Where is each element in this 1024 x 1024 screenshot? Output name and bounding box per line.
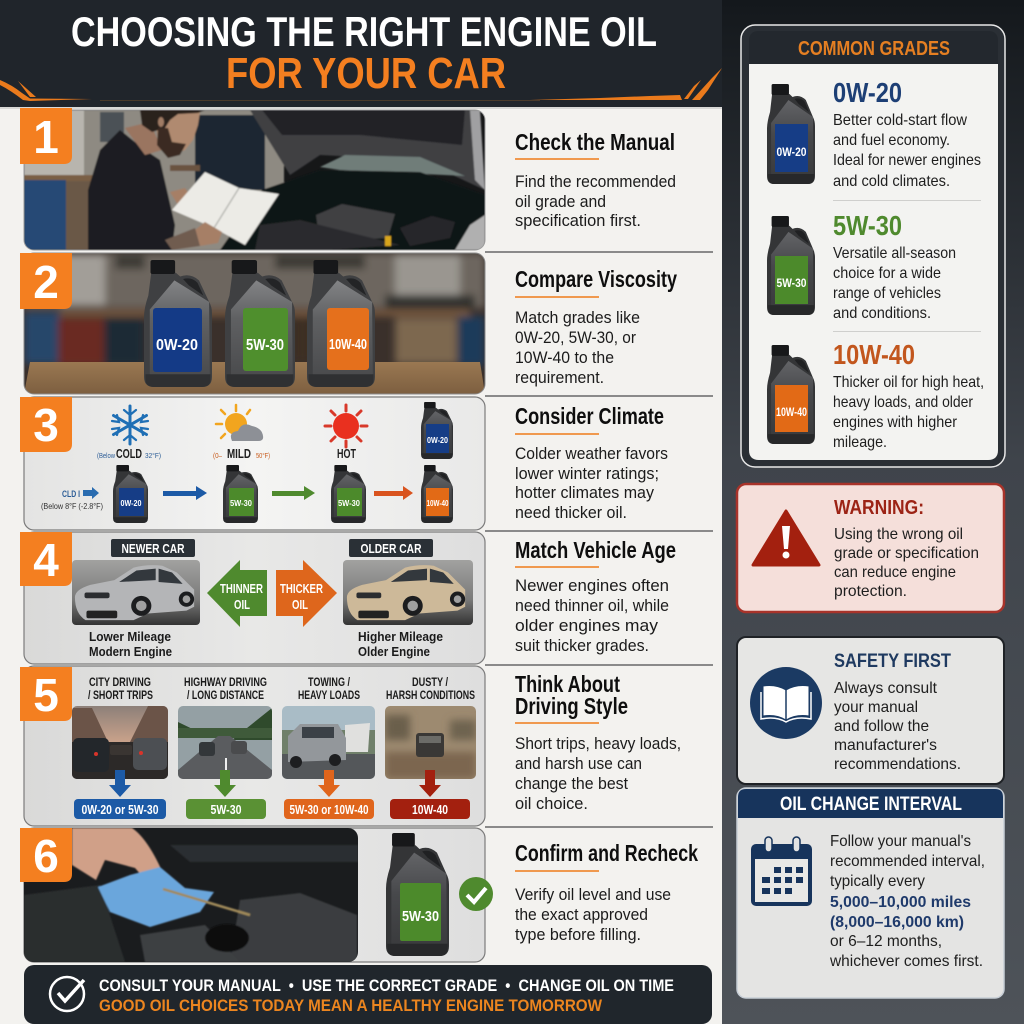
- grade: 0W-20: 0W-20: [776, 145, 807, 159]
- grade: 10W-40: 10W-40: [776, 405, 807, 419]
- divider: [485, 826, 713, 828]
- text block: driving style: Driving Style: [515, 693, 628, 719]
- footer banner: GOOD OIL CHOICES TODAY MEAN A HEALTHY ENGINE TOMORROW: [99, 996, 603, 1015]
- panel: oil change interval: OIL CHANGE INTERVAL: [780, 794, 962, 815]
- caption: higher mileage: Older Engine: [358, 644, 430, 659]
- footer banner: [24, 965, 712, 1024]
- jug: top 0W-20: 0W-20: [427, 435, 448, 445]
- arrow: thinner oil: OIL: [234, 598, 250, 612]
- jug: 0W-20: [113, 465, 148, 523]
- panel: warning: grade or specification: [834, 545, 979, 562]
- panel: oil change interval: 5,000–10,000 miles: [830, 894, 971, 911]
- text block: consider climate: Consider Climate: [515, 403, 664, 429]
- text block: driving style: change the best: [515, 774, 628, 793]
- text block: consider climate: Colder weather favors: [515, 444, 668, 463]
- photo: silver newer car: [72, 560, 200, 625]
- left column background: [0, 0, 722, 1024]
- step 1 photo rim: [24, 110, 485, 250]
- arrow: thinner oil: THINNER: [220, 582, 263, 596]
- panel: warning: Using the wrong oil: [834, 526, 963, 543]
- panel: oil change interval: typically every: [830, 873, 925, 890]
- column: highway driving: 5W-30: [210, 803, 242, 817]
- caption: lower mileage: Lower Mileage: [89, 629, 171, 644]
- jug: 5W-30 second: [331, 465, 366, 523]
- header banner: [0, 0, 722, 107]
- column: towing: 5W-30 or 10W-40: [290, 803, 369, 817]
- jug: 10W-40: 10W-40: [426, 499, 449, 508]
- badge: older car: [349, 539, 433, 557]
- text block: check the manual: [515, 129, 676, 230]
- grade: 10W-40: heavy loads, and older: [833, 394, 974, 411]
- badge: newer car: NEWER CAR: [122, 542, 184, 556]
- badge: step 2: 2: [33, 256, 59, 308]
- column: dusty: [385, 677, 476, 819]
- panel: step 5 driving style: [24, 666, 485, 826]
- caption: lower mileage: Modern Engine: [89, 644, 172, 659]
- column: dusty: HARSH CONDITIONS: [386, 690, 475, 702]
- label: cold: (Below: [97, 453, 116, 460]
- grade: 5W-30: range of vehicles: [833, 285, 941, 302]
- text block: match vehicle age: need thinner oil, while: [515, 596, 669, 615]
- panel: oil change interval: or 6–12 months,: [830, 933, 942, 950]
- text block: match vehicle age: Newer engines often: [515, 576, 669, 595]
- label: mild: (0–: [213, 453, 222, 460]
- label: mild: [213, 446, 270, 461]
- cold range label: CLD I: [62, 489, 80, 499]
- text block: driving style: and harsh use can: [515, 754, 642, 773]
- panel: common grades: [741, 25, 1005, 467]
- text block: confirm and recheck: the exact approved: [515, 905, 648, 924]
- jug: 5W-30: 5W-30: [402, 908, 439, 925]
- text block: match vehicle age: [515, 537, 676, 655]
- text block: compare viscosity: [515, 266, 677, 387]
- panel: safety first: manufacturer's: [834, 737, 937, 754]
- text block: check the manual: oil grade and: [515, 192, 606, 211]
- badge: step 1: 1: [33, 111, 59, 163]
- badge: older car: OLDER CAR: [360, 542, 422, 556]
- cold range label: [41, 487, 103, 511]
- text block: match vehicle age: Match Vehicle Age: [515, 537, 676, 563]
- title: FOR YOUR CAR: [226, 49, 506, 98]
- text block: consider climate: lower winter ratings;: [515, 464, 659, 483]
- column: city driving: [72, 677, 168, 819]
- panel: step 4 vehicle age: [24, 532, 485, 664]
- icon: hot sun: [325, 405, 367, 447]
- jug: 5W-30: 5W-30: [230, 498, 252, 508]
- step 2 photo: three oil jugs: [24, 253, 485, 394]
- grade: 10W-40: [767, 339, 984, 451]
- panel: warning: can reduce engine: [834, 564, 956, 581]
- badge: newer car: [111, 539, 195, 557]
- label: mild: 50°F): [256, 452, 270, 460]
- badge: step 5: [20, 667, 72, 721]
- photo: beige older car: [343, 560, 473, 625]
- label: hot: HOT: [337, 446, 356, 461]
- badge: step 5: 5: [33, 669, 59, 721]
- grade: 5W-30: Versatile all-season: [833, 245, 956, 262]
- column: city driving: CITY DRIVING: [89, 677, 151, 689]
- text block: driving style: Short trips, heavy loads,: [515, 734, 681, 753]
- panel: safety first: recommendations.: [834, 756, 961, 773]
- text block: compare viscosity: Match grades like: [515, 308, 640, 327]
- jug 0W-20: 0W-20: [156, 337, 198, 354]
- icon: footer check: [50, 977, 84, 1011]
- grade: 5W-30: [767, 210, 956, 322]
- panel: step 3 climate: [24, 397, 485, 530]
- panel: oil change interval: (8,000–16,000 km): [830, 914, 964, 931]
- column: highway driving: HIGHWAY DRIVING: [184, 677, 267, 689]
- text block: match vehicle age: older engines may: [515, 616, 659, 635]
- badge: step 1: [20, 108, 72, 164]
- badge: step 6: 6: [33, 830, 59, 882]
- badge: step 4: 4: [33, 534, 59, 586]
- arrow: thicker oil: OIL: [292, 598, 308, 612]
- column: highway driving: [178, 677, 272, 819]
- jug 5W-30: [225, 260, 295, 387]
- divider: [485, 395, 713, 397]
- grade: 0W-20: [767, 77, 981, 190]
- icon: snowflake: [112, 406, 148, 444]
- column: towing: [282, 677, 375, 819]
- text block: consider climate: hotter climates may: [515, 483, 654, 502]
- jug: 10W-40: [421, 465, 453, 523]
- grade: 10W-40: Thicker oil for high heat,: [833, 374, 984, 391]
- jug 0W-20: [144, 260, 212, 387]
- text block: check the manual: specification first.: [515, 211, 641, 230]
- column: dusty: 10W-40: [412, 803, 448, 817]
- text block: compare viscosity: 10W-40 to the: [515, 348, 614, 367]
- jug 10W-40: [307, 260, 375, 387]
- label: mild: MILD: [227, 446, 251, 461]
- panel: warning: WARNING:: [834, 497, 924, 519]
- jug: 5W-30 second: 5W-30: [338, 498, 360, 508]
- badge: step 6: [20, 828, 72, 882]
- text block: consider climate: [515, 403, 668, 522]
- text block: confirm and recheck: Confirm and Recheck: [515, 840, 698, 866]
- caption: higher mileage: Higher Mileage: [358, 629, 443, 644]
- panel: safety first: SAFETY FIRST: [834, 651, 951, 672]
- badge: step 3: [20, 397, 72, 452]
- arrow: thicker oil: THICKER: [280, 582, 323, 596]
- grade: 0W-20: and cold climates.: [833, 173, 950, 190]
- step 2 photo rim: [24, 253, 485, 394]
- grade: 0W-20: 0W-20: [833, 77, 902, 108]
- grade: 0W-20: Better cold-start flow: [833, 112, 967, 129]
- panel: oil change interval: [737, 788, 1004, 998]
- badge: step 3: 3: [33, 399, 59, 451]
- arrow: orange: [374, 486, 413, 500]
- grade: 10W-40: mileage.: [833, 434, 887, 451]
- text block: match vehicle age: suit thicker grades.: [515, 636, 649, 655]
- arrow: blue: [163, 486, 207, 500]
- photo: dipstick check: [24, 828, 358, 962]
- grade: 5W-30: 5W-30: [833, 210, 902, 241]
- panel: oil change interval: Follow your manual's: [830, 833, 971, 850]
- jug: 5W-30: [223, 465, 258, 523]
- arrow: thinner oil: [207, 560, 267, 627]
- panel: warning: [737, 484, 1004, 612]
- panel: warning: protection.: [834, 583, 907, 600]
- panel: oil change interval: whichever comes first.: [829, 953, 983, 970]
- rule below header: [0, 107, 722, 109]
- grade: 0W-20: and fuel economy.: [833, 132, 950, 149]
- jug 5W-30: 5W-30: [246, 337, 284, 354]
- icon: warning triangle: [753, 511, 819, 565]
- grade: 5W-30: and conditions.: [833, 305, 931, 322]
- panel: safety first: and follow the: [834, 718, 929, 735]
- panel: safety first: your manual: [834, 699, 918, 716]
- text block: driving style: Think About: [515, 671, 620, 697]
- icon: calendar: [751, 837, 812, 906]
- grade: 5W-30: choice for a wide: [833, 265, 941, 282]
- grade: 0W-20: Ideal for newer engines: [833, 152, 981, 169]
- text block: compare viscosity: Compare Viscosity: [515, 266, 677, 292]
- text block: check the manual: Check the Manual: [515, 129, 675, 155]
- grade: 5W-30: 5W-30: [776, 276, 807, 290]
- cold range label: (Below 8°F (-2.8°F): [41, 501, 103, 511]
- jug: 0W-20: 0W-20: [120, 498, 142, 508]
- grade: 10W-40: 10W-40: [833, 339, 915, 370]
- text block: check the manual: Find the recommended: [515, 172, 676, 191]
- title: CHOOSING THE RIGHT ENGINE OIL: [71, 8, 657, 55]
- label: cold: COLD: [116, 446, 142, 461]
- jug: top 0W-20: [421, 402, 453, 459]
- panel: oil change interval: recommended interval,: [830, 853, 985, 870]
- badge: step 2: [20, 253, 72, 309]
- title: [71, 8, 657, 98]
- grade: 10W-40: engines with higher: [833, 414, 958, 431]
- panel: step 6 confirm: [24, 828, 493, 962]
- text block: confirm and recheck: Verify oil level and use: [515, 885, 671, 904]
- jug: 5W-30: [386, 833, 449, 956]
- heading: COMMON GRADES: [798, 38, 950, 60]
- text block: consider climate: need thicker oil.: [515, 503, 627, 522]
- footer banner: CONSULT YOUR MANUAL • USE THE CORRECT GRADE • CHANGE OIL ON TIME: [99, 976, 674, 995]
- text block: compare viscosity: 0W-20, 5W-30, or: [515, 328, 636, 347]
- text block: confirm and recheck: type before filling.: [515, 925, 641, 944]
- icon: book: [750, 667, 822, 739]
- text block: confirm and recheck: [515, 840, 698, 944]
- divider: [485, 664, 713, 666]
- label: cold: [97, 446, 161, 461]
- column: city driving: 0W-20 or 5W-30: [82, 803, 159, 817]
- icon: green check: [459, 877, 493, 911]
- caption: higher mileage: [358, 629, 443, 659]
- column: towing: TOWING /: [308, 677, 351, 689]
- column: towing: HEAVY LOADS: [298, 690, 360, 702]
- divider: [485, 530, 713, 532]
- panel: safety first: Always consult: [834, 680, 938, 697]
- text block: driving style: oil choice.: [515, 794, 588, 813]
- step 1 photo: mechanic reading manual: [24, 110, 485, 250]
- text block: compare viscosity: requirement.: [515, 368, 604, 387]
- jug 10W-40: 10W-40: [329, 336, 367, 353]
- icon: sun behind cloud: [216, 405, 263, 441]
- arrow: green: [272, 486, 315, 500]
- column: city driving: / SHORT TRIPS: [88, 690, 153, 702]
- arrow: thicker oil: [276, 560, 337, 627]
- text block: driving style: [515, 671, 681, 813]
- badge: step 4: [20, 532, 72, 586]
- right sidebar background: [722, 0, 1024, 1024]
- label: cold: 32°F): [145, 452, 161, 460]
- column: highway driving: / LONG DISTANCE: [187, 690, 264, 702]
- divider: [485, 251, 713, 253]
- column: dusty: DUSTY /: [412, 677, 449, 689]
- panel: safety first: [737, 637, 1004, 784]
- caption: lower mileage: [89, 629, 172, 659]
